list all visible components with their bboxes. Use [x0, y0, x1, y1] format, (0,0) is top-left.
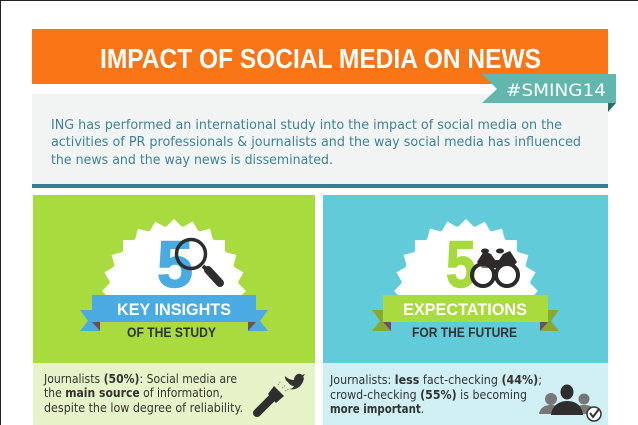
hashtag ribbon: [482, 74, 616, 112]
expectation text: crowd-checking (55%) is becoming: [330, 387, 527, 402]
ribbon: key insights: [80, 295, 268, 331]
icon: flashlight: [257, 381, 289, 413]
ribbon: expectations: [372, 295, 559, 331]
starburst badge: [102, 219, 246, 295]
subheading: of the study: OF THE STUDY: [127, 325, 216, 340]
panel: expectations: [323, 195, 608, 425]
intro text: the news and the way news is disseminated.: [51, 153, 333, 168]
panel: key insights: [33, 195, 315, 425]
ribbon: expectations: EXPECTATIONS: [403, 300, 527, 319]
starburst badge: [394, 219, 538, 295]
icon: twitter bird: [285, 374, 305, 389]
expectation text: Journalists: less fact-checking (44%);: [329, 372, 542, 387]
intro text: activities of PR professionals & journalists and the way social media has influenced: [51, 135, 581, 150]
insight text: Journalists (50%): Social media are: [43, 371, 237, 386]
number 5: 5: [446, 227, 476, 301]
intro text: ING has performed an international study into the impact of social media on the: [51, 118, 562, 133]
ribbon: key insights: KEY INSIGHTS: [117, 300, 231, 319]
insight text: [43, 371, 243, 415]
insight text: despite the low degree of reliability.: [44, 400, 243, 415]
subheading: for the future: FOR THE FUTURE: [412, 325, 517, 340]
expectation text: more important.: [330, 401, 424, 416]
icon: binoculars: [472, 248, 518, 286]
insight text: the main source of information,: [44, 385, 223, 400]
insight card: [33, 363, 315, 425]
expectation card: [323, 363, 608, 425]
hashtag ribbon: #SMING14: [506, 81, 606, 101]
panel: introduction: [32, 94, 608, 188]
number 5: 5: [157, 227, 193, 301]
title: IMPACT OF SOCIAL MEDIA ON NEWS: [100, 43, 541, 74]
expectation text: [329, 372, 542, 416]
icon: crowd with check mark: [539, 384, 601, 421]
title banner: [32, 29, 608, 84]
intro text: [51, 118, 581, 168]
icon: magnifying glass: [176, 240, 220, 283]
